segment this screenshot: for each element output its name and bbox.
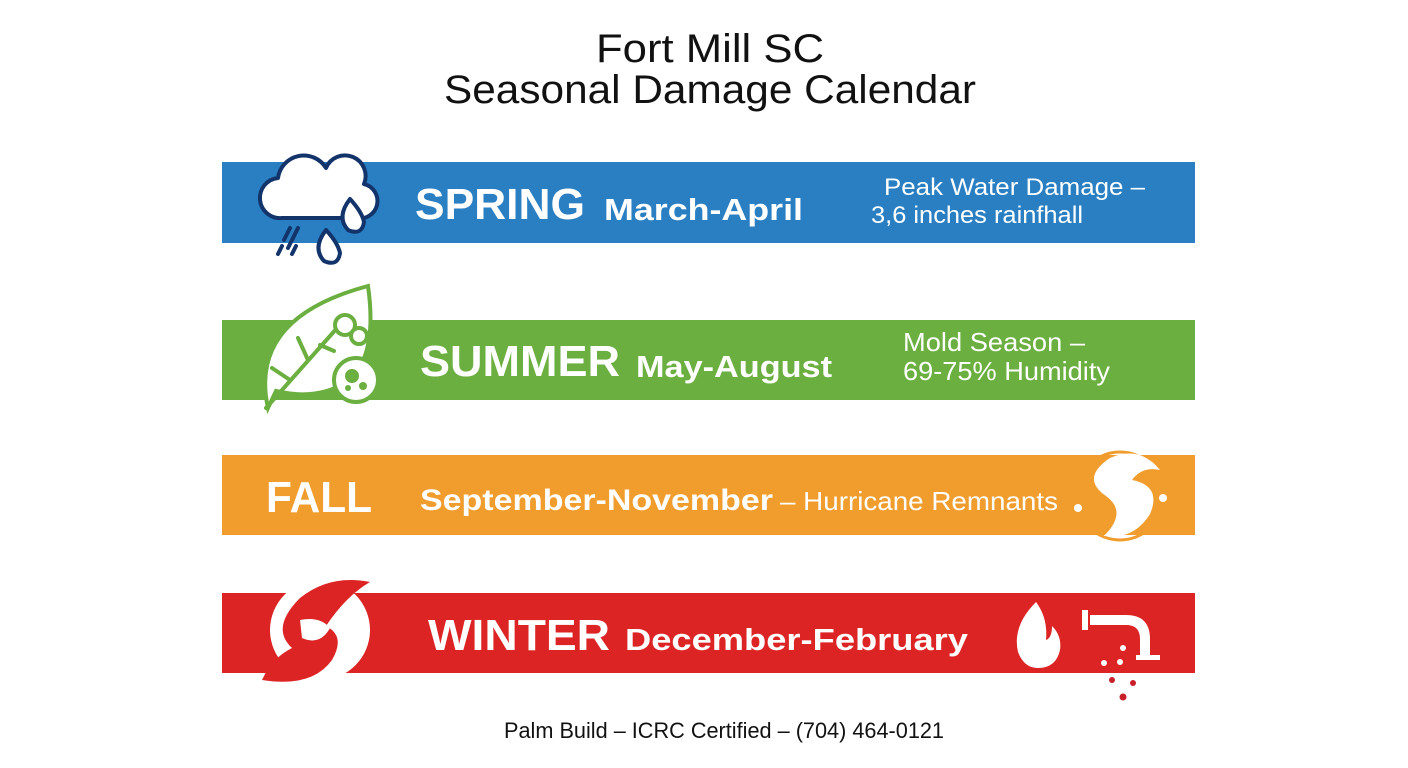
panel: winter	[222, 580, 1195, 700]
summer note: Mold Season –	[903, 327, 1086, 357]
icon: hurricane	[1074, 452, 1167, 540]
panel: spring: 3,6 inches rainfhall	[871, 202, 1083, 229]
panel: spring	[222, 155, 1195, 263]
icon: rain cloud	[260, 155, 377, 263]
spring heading: SPRING	[415, 180, 585, 229]
panel: winter: December-February	[625, 622, 969, 657]
icon: leaking pipe	[1082, 610, 1160, 666]
panel: summer	[222, 286, 1195, 408]
footer: Palm Build – ICRC Certified – (704) 464-0121	[504, 718, 944, 743]
icon: leaf with mold	[265, 286, 378, 408]
panel: fall: September-November	[420, 484, 773, 517]
summer heading: SUMMER	[420, 337, 620, 386]
panel: summer: May-August	[636, 349, 832, 384]
winter heading: WINTER	[428, 611, 610, 660]
icon: fire	[1017, 602, 1060, 668]
title: Fort Mill SC	[596, 27, 824, 71]
spring note: Peak Water Damage –	[884, 174, 1146, 201]
panel: fall: – Hurricane Remnants	[780, 486, 1058, 516]
icon: storm	[262, 580, 370, 682]
title	[444, 27, 976, 112]
fall heading: FALL	[266, 473, 372, 522]
panel: spring: March-April	[604, 192, 803, 227]
panel: summer: 69-75% Humidity	[903, 356, 1110, 386]
title: Seasonal Damage Calendar	[444, 68, 976, 112]
panel: fall	[222, 452, 1195, 540]
